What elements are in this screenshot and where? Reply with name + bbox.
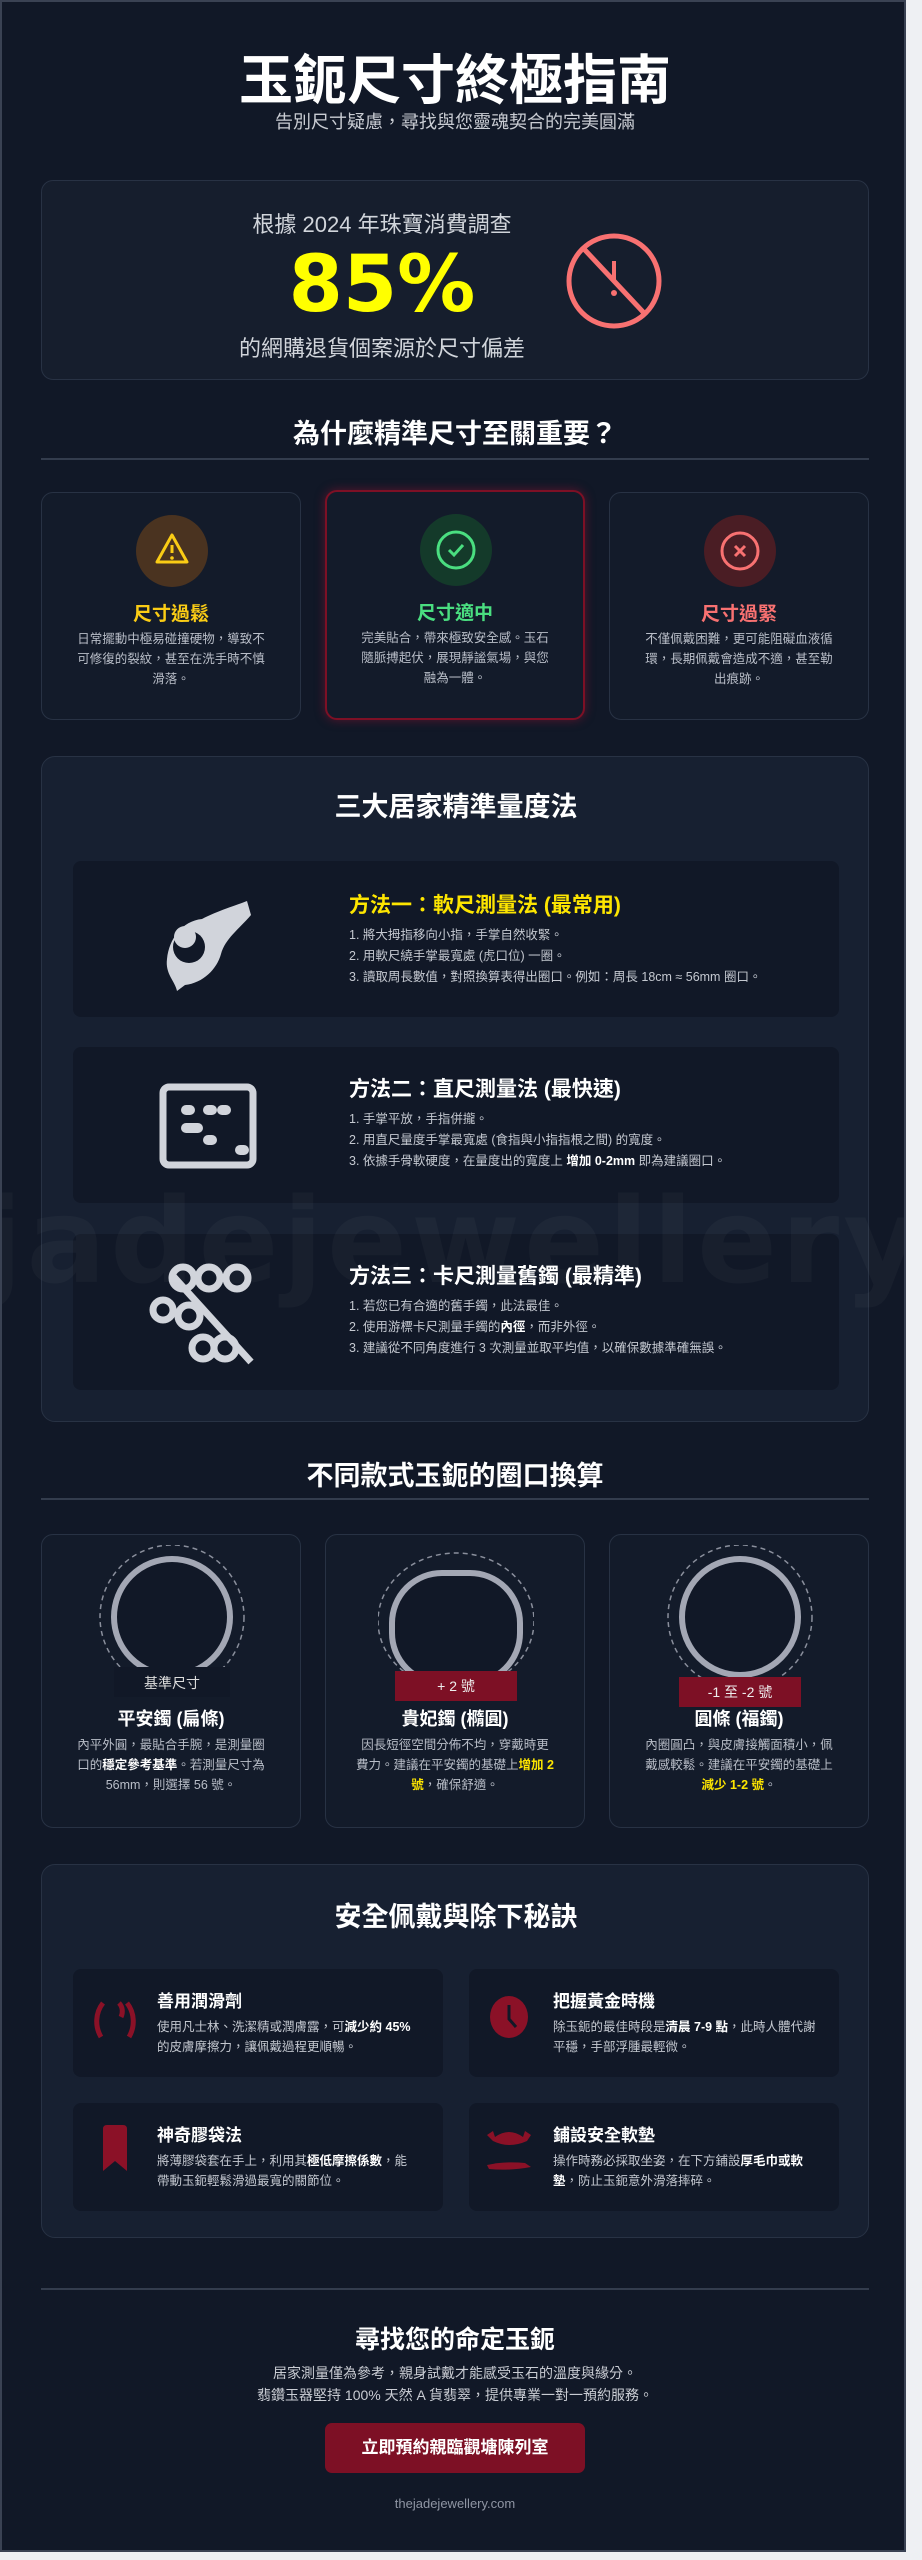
method 3: 1. 若您已有合適的舊手鐲，此法最佳。 <box>349 1299 563 1313</box>
method 1: 方法一：軟尺測量法 (最常用) <box>349 894 621 917</box>
icon: check <box>420 514 492 586</box>
icon: hand <box>166 901 251 991</box>
panel: safety tips: 安全佩戴與除下秘訣 <box>334 1902 578 1932</box>
icon: warning <box>136 515 208 587</box>
card: fit <box>325 490 585 720</box>
title: 玉鈪尺寸終極指南 <box>239 51 671 111</box>
icon: pad <box>487 2131 531 2170</box>
icon: ruler box <box>160 1084 256 1168</box>
method 3 <box>73 1234 839 1390</box>
card: oval bangle: 貴妃鐲 (橢圓) <box>402 1709 508 1729</box>
icon: ring base <box>99 1545 245 1691</box>
card: tight <box>609 492 869 720</box>
CTA button <box>325 2423 585 2473</box>
icon: caliper rings <box>150 1264 254 1364</box>
panel: methods: 三大居家精準量度法 <box>334 792 578 822</box>
method 3: 方法三：卡尺測量舊鐲 (最精準) <box>349 1265 642 1288</box>
card: flat bangle: 平安鐲 (扁條) <box>118 1709 224 1729</box>
card: oval bangle <box>325 1534 585 1828</box>
subtitle: 告別尺寸疑慮，尋找與您靈魂契合的完美圓滿 <box>275 112 635 132</box>
card: loose: 尺寸過鬆 <box>133 604 209 625</box>
card: fit: 完美貼合，帶來極致安全感。玉石隨脈搏起伏，展現靜謐氣場，與您融為一體。 <box>361 631 549 685</box>
tip: plastic bag: 神奇膠袋法 <box>157 2126 242 2145</box>
footer heading: 尋找您的命定玉鈪 <box>355 2326 555 2354</box>
icon: oval ring: + 2 號 <box>437 1678 475 1694</box>
footer text <box>257 2365 653 2403</box>
stat text: 根據 2024 年珠寶消費調查 <box>252 212 512 237</box>
stat text: 的網購退貨個案源於尺寸偏差 <box>239 336 525 361</box>
stat panel <box>41 180 869 380</box>
icon: clock <box>490 1996 528 2038</box>
panel: safety tips <box>41 1864 869 2238</box>
tip: soft pad: 操作時務必採取坐姿，在下方鋪設厚毛巾或軟墊，防止玉鈪意外滑落摔碎。 <box>553 2154 803 2188</box>
card: flat bangle <box>41 1534 301 1828</box>
tip: lubricant <box>73 1969 443 2077</box>
method 2: 方法二：直尺測量法 (最快速) <box>349 1078 621 1101</box>
method 3: 3. 建議從不同角度進行 3 次測量並取平均值，以確保數據準確無誤。 <box>349 1341 727 1355</box>
card: tight: 不僅佩戴困難，更可能阻礙血液循環，長期佩戴會造成不適，甚至勒出痕跡。 <box>645 632 833 686</box>
heading: why: 為什麼精準尺寸至關重要？ <box>293 419 617 449</box>
tip: soft pad: 鋪設安全軟墊 <box>553 2126 655 2145</box>
icon: round ring: -1 至 -2 號 <box>708 1684 772 1700</box>
stat text <box>239 212 525 361</box>
card: flat bangle: 內平外圓，最貼合手腕，是測量圈口的穩定參考基準。若測量尺寸為 56mm，則選擇 56 號。 <box>77 1738 265 1792</box>
tip: soft pad <box>469 2103 839 2211</box>
icon: ring base: 基準尺寸 <box>144 1675 200 1691</box>
icon: lubricant <box>94 2001 136 2038</box>
tip: timing: 把握黃金時機 <box>553 1992 655 2011</box>
icon: bookmark <box>103 2125 127 2171</box>
tip: lubricant: 使用凡士林、洗潔精或潤膚露，可減少約 45% 的皮膚摩擦力，讓佩戴過程更順暢。 <box>157 2020 411 2054</box>
card: loose <box>41 492 301 720</box>
CTA button: 立即預約親臨觀塘陳列室 <box>362 2438 548 2457</box>
icon: cross <box>704 515 776 587</box>
method 2 <box>73 1047 839 1203</box>
method 1: 1. 將大拇指移向小指，手掌自然收緊。 <box>349 928 563 942</box>
tip: plastic bag: 將薄膠袋套在手上，利用其極低摩擦係數，能帶動玉鈪輕鬆滑過最寬的關節位。 <box>157 2154 407 2188</box>
icon: round ring <box>667 1545 813 1707</box>
tip: timing: 除玉鈪的最佳時段是清晨 7-9 點，此時人體代謝平穩，手部浮腫最輕微。 <box>553 2020 816 2054</box>
card: round bangle: 圓條 (福鐲) <box>694 1709 784 1729</box>
card: round bangle <box>609 1534 869 1828</box>
stat text: 85% <box>289 240 475 330</box>
tip: lubricant: 善用潤滑劑 <box>157 1992 242 2011</box>
card: tight: 尺寸過緊 <box>701 604 777 625</box>
panel: methods <box>41 756 869 1422</box>
icon: no-warning <box>566 234 662 328</box>
heading: conversion: 不同款式玉鈪的圈口換算 <box>306 1461 604 1491</box>
tip: timing <box>469 1969 839 2077</box>
card: round bangle: 內圈圓凸，與皮膚接觸面積小，佩戴感較鬆。建議在平安鐲的基礎上 減少 1-2 號。 <box>645 1738 833 1792</box>
card: fit: 尺寸適中 <box>417 603 493 624</box>
footer text: 翡鑽玉器堅持 100% 天然 A 貨翡翠，提供專業一對一預約服務。 <box>257 2387 653 2403</box>
tip: plastic bag <box>73 2103 443 2211</box>
footer text: 居家測量僅為參考，親身試戴才能感受玉石的溫度與緣分。 <box>273 2365 637 2381</box>
method 1 <box>73 861 839 1017</box>
method 2: 2. 用直尺量度手掌最寬處 (食指與小指指根之間) 的寬度。 <box>349 1133 666 1147</box>
method 3: 2. 使用游標卡尺測量手鐲的內徑，而非外徑。 <box>349 1320 600 1334</box>
icon: oval ring <box>378 1552 534 1701</box>
method 1: 2. 用軟尺繞手掌最寬處 (虎口位) 一圈。 <box>349 949 566 963</box>
method 1: 3. 讀取周長數值，對照換算表得出圈口。例如：周長 18cm ≈ 56mm 圈口。 <box>349 970 761 984</box>
method 2: 1. 手掌平放，手指併攏。 <box>349 1112 488 1126</box>
card: oval bangle: 因長短徑空間分佈不均，穿戴時更費力。建議在平安鐲的基礎上增加 2 號，確保舒適。 <box>356 1738 554 1792</box>
method 2: 3. 依據手骨軟硬度，在量度出的寬度上 增加 0-2mm 即為建議圈口。 <box>349 1154 726 1168</box>
url: thejadejewellery.com <box>395 2496 515 2511</box>
card: loose: 日常擺動中極易碰撞硬物，導致不可修復的裂紋，甚至在洗手時不慎滑落。 <box>77 632 265 686</box>
